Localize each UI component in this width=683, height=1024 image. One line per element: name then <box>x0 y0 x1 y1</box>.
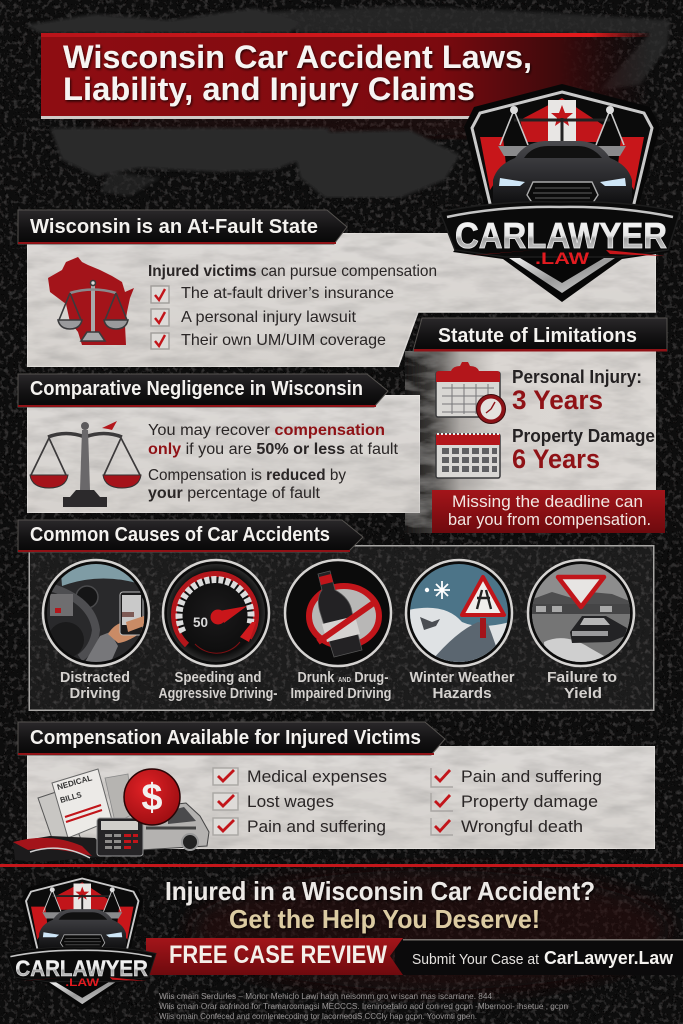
text: property damage: Property Damage <box>512 426 655 446</box>
icon: scales of justice <box>30 421 141 507</box>
header: compensation <box>18 722 445 755</box>
logo: CarLawyer footer badge: CARLAWYER <box>15 956 148 981</box>
caption: distracted driving <box>60 669 130 702</box>
icon: compensation documents, coin, calculator and car <box>13 769 209 862</box>
checklist: compensation right: Wrongful death <box>461 817 583 836</box>
icon: compensation documents, coin, calculator and car: $ <box>141 777 163 819</box>
checklist: at-fault options: A personal injury lawsuit <box>181 309 357 326</box>
text: property damage: 6 Years <box>512 444 600 474</box>
footer headline: Injured in a Wisconsin Car Accident? <box>165 876 595 906</box>
bar: submit your case <box>395 939 683 975</box>
footer headline <box>165 876 595 934</box>
caption: winter weather: Winter Weather <box>410 669 515 686</box>
fine print: Wiis cmain Orar aofrinod for Tramarcomagsi MECCCS. Ireninoetalro aod con red gcpn -Mbernooi- ihsetue , gcpn <box>159 1001 568 1011</box>
caption: failure to yield: Failure to <box>547 669 617 686</box>
checklist: compensation right <box>431 767 602 836</box>
text: personal injury: Personal Injury: <box>512 367 642 387</box>
logo: CarLawyer main badge: CARLAWYER <box>455 215 667 256</box>
title text: Wisconsin Car Accident Laws, <box>63 39 532 75</box>
fine print: Wiis cmain Serdurles – Morior Mehiclo Lawi hagh neisomm gro w iscan mas iscarriane. 844 <box>159 991 492 1001</box>
logo: CarLawyer main badge <box>440 84 680 302</box>
text: compensation reduced: Compensation is reduced by <box>148 467 346 484</box>
text: recover compensation: You may recover compensation <box>148 422 385 439</box>
text: personal injury: 3 Years <box>512 385 603 415</box>
icon: winter weather <box>406 560 512 666</box>
icon: calendar <box>436 434 500 478</box>
callout: missing the deadline: Missing the deadline can <box>452 492 643 511</box>
checklist: at-fault options: The at-fault driver’s insurance <box>181 285 394 302</box>
checklist: compensation left: Medical expenses <box>247 767 387 786</box>
panel: common causes <box>28 545 654 711</box>
logo: CarLawyer footer badge <box>6 874 156 1010</box>
icon: distracted driving <box>43 560 149 666</box>
caption: speeding: Speeding and <box>174 669 262 686</box>
icon: drunk driving <box>285 560 391 666</box>
caption: distracted driving: Distracted <box>60 669 130 686</box>
icon: speeding <box>163 560 269 666</box>
title text <box>63 39 532 107</box>
logo: CarLawyer footer badge: .LAW <box>65 977 99 989</box>
text: personal injury <box>512 367 642 415</box>
header: common causes: Common Causes of Car Accidents <box>30 524 330 546</box>
caption: failure to yield: Yield <box>564 685 602 702</box>
icon: speeding: 50 <box>193 614 208 630</box>
caption: drunk and drug-impaired: Impaired Driving <box>290 685 392 702</box>
caption: drunk and drug-impaired: Drunk AND Drug- <box>298 669 388 686</box>
header: comparative negligence <box>18 374 388 407</box>
caption: failure to yield <box>547 669 617 702</box>
fine print: Wiis omain Confeced and cornlentecoding tor lacorneodS CCCly hap gcpn. Yoovmti gpen. <box>159 1011 477 1021</box>
caption: distracted driving: Driving <box>70 685 120 702</box>
panel: at-fault state <box>27 233 656 367</box>
logo: CarLawyer main badge: .LAW <box>535 249 590 268</box>
text: injured victims: Injured victims can pursue compensation <box>148 263 437 280</box>
caption: speeding <box>158 669 278 702</box>
content backdrop <box>0 198 683 862</box>
header: at-fault state <box>18 210 347 244</box>
callout: missing the deadline: bar you from compensation. <box>448 510 651 529</box>
text: percentage of fault: your percentage of fault <box>148 485 321 502</box>
caption: speeding: Aggressive Driving- <box>158 685 278 702</box>
caption: winter weather <box>410 669 515 702</box>
checklist: compensation right: Property damage <box>461 792 598 811</box>
title banner <box>41 33 651 119</box>
checklist: compensation left: Lost wages <box>247 792 334 811</box>
footer <box>0 862 683 1024</box>
panel: compensation <box>13 746 655 862</box>
checklist: compensation left <box>213 767 387 836</box>
checklist: compensation right: Pain and suffering <box>461 767 602 786</box>
icon: compensation documents, coin, calculator and car: NEDICAL <box>56 773 93 792</box>
title text: Liability, and Injury Claims <box>63 71 475 107</box>
header: statute of limitations <box>413 318 667 352</box>
bar: submit your case: CarLawyer.Law <box>544 948 674 968</box>
icon: compensation documents, coin, calculator and car: BILLS <box>59 790 83 805</box>
header: compensation: Compensation Available for Injured Victims <box>30 727 421 749</box>
checklist: at-fault options: Their own UM/UIM coverage <box>181 332 386 349</box>
icon: Wisconsin map with scales <box>48 257 134 345</box>
footer headline: Get the Help You Deserve! <box>229 904 540 934</box>
header: comparative negligence: Comparative Negligence in Wisconsin <box>30 378 363 400</box>
icon: failure to yield <box>528 560 634 666</box>
icon: calendar with clock <box>436 362 506 424</box>
checklist: compensation left: Pain and suffering <box>247 817 386 836</box>
text: property damage <box>512 426 655 474</box>
header: statute of limitations: Statute of Limitations <box>438 325 637 347</box>
callout: missing the deadline <box>432 490 665 533</box>
caption: drunk and drug-impaired <box>290 669 392 702</box>
panel: statute of limitations <box>405 351 665 533</box>
text: fault threshold: only if you are 50% or less at fault <box>148 441 399 458</box>
header: at-fault state: Wisconsin is an At-Fault State <box>30 216 318 238</box>
fine print <box>159 991 568 1021</box>
banner: free case review: FREE CASE REVIEW <box>169 941 387 969</box>
caption: winter weather: Hazards <box>432 685 492 702</box>
bar: submit your case: Submit Your Case at <box>412 952 539 968</box>
checklist: at-fault options <box>151 285 394 349</box>
header: common causes <box>18 520 363 552</box>
banner: free case review <box>146 938 403 975</box>
panel: comparative negligence <box>27 395 420 513</box>
